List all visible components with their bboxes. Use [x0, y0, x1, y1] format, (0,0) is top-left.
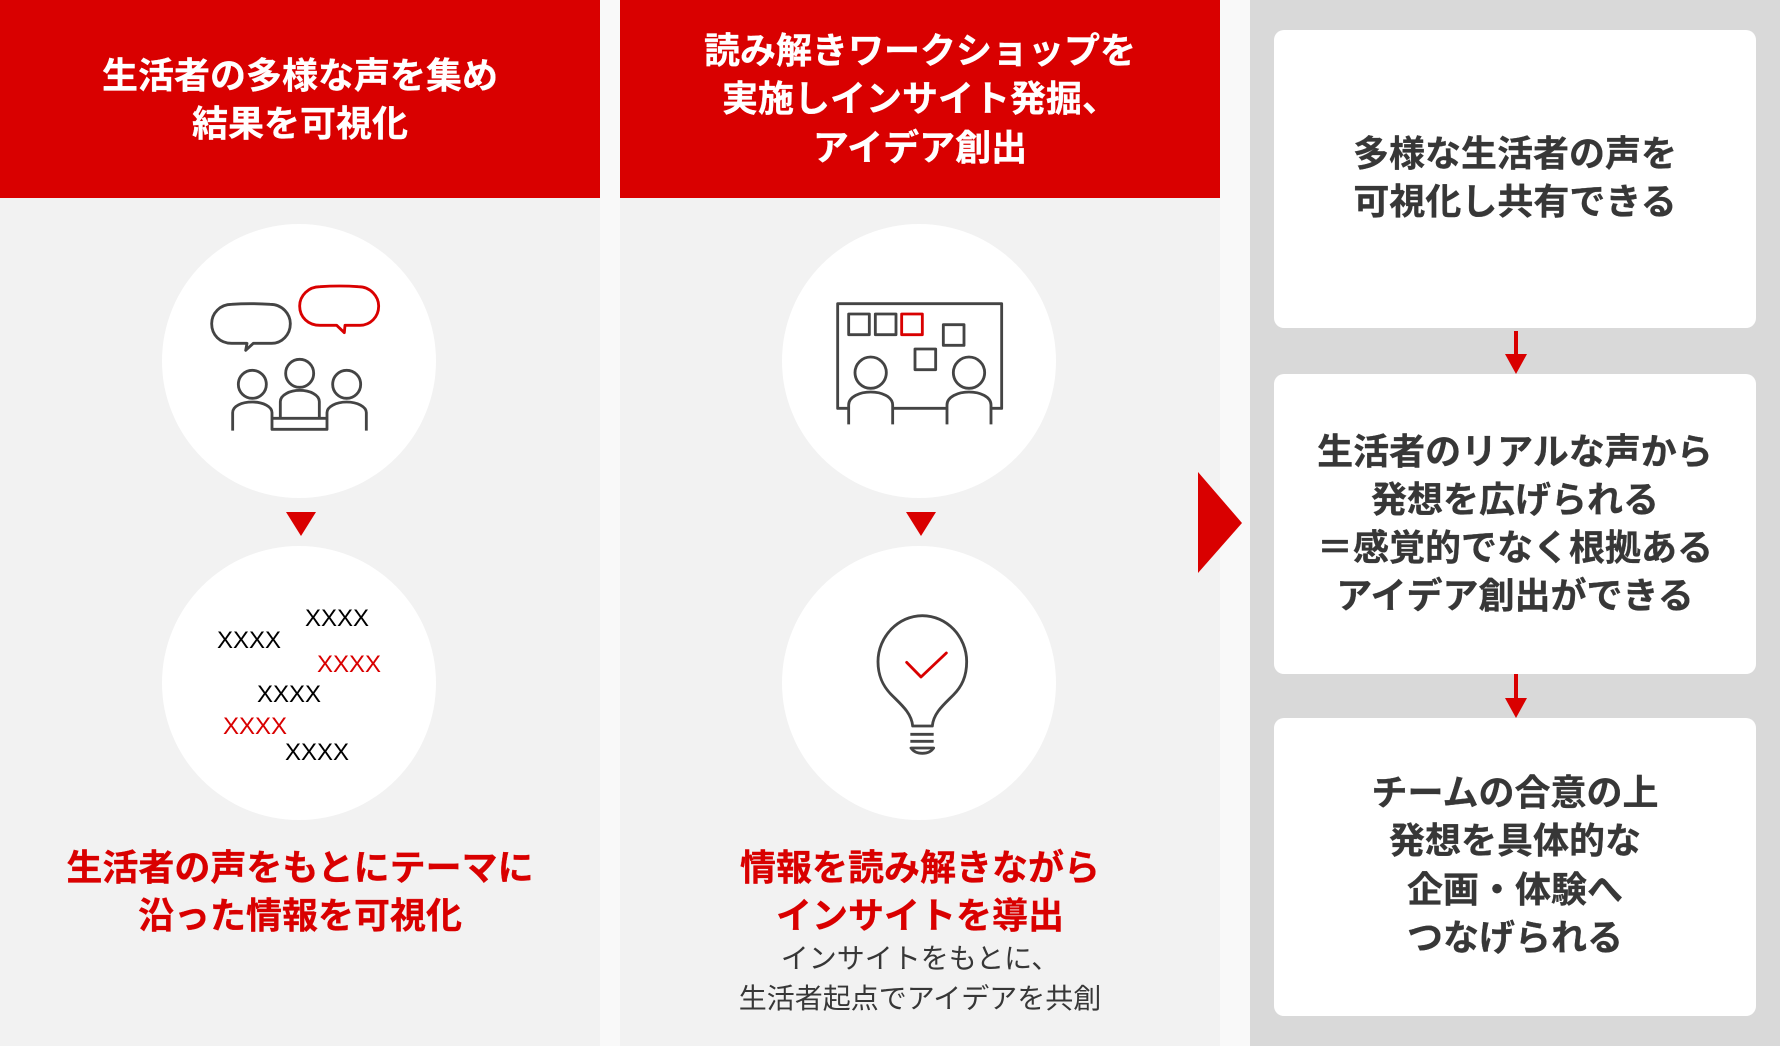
- text: outcome 2: [1317, 430, 1713, 616]
- text: outcome 1: 多様な生活者の声を: [1353, 132, 1677, 174]
- text: column 2 note: [739, 943, 1101, 1014]
- arrow: card 2 to card 3: [1505, 674, 1527, 718]
- text: column 2 note: インサイトをもとに、: [781, 943, 1059, 974]
- icon: workshop board: [838, 304, 1002, 424]
- heading: column 1: 生活者の多様な声を集め: [102, 54, 498, 96]
- circle: workshop: [782, 224, 1056, 498]
- keywords cloud: [217, 605, 381, 766]
- card: outcome 3: [1274, 718, 1756, 1016]
- arrow: column 1 down: [286, 512, 316, 536]
- text: column 2 note: 生活者起点でアイデアを共創: [739, 983, 1101, 1014]
- text: outcome 2: 生活者のリアルな声から: [1317, 430, 1713, 472]
- arrow: column 2 down: [906, 512, 936, 536]
- panel: right outcomes background: [1250, 0, 1780, 1046]
- keywords cloud: XXXX: [285, 739, 349, 766]
- text: outcome 2: ＝感覚的でなく根拠ある: [1317, 527, 1713, 568]
- heading: column 2: アイデア創出: [813, 127, 1027, 168]
- circle: insight: [782, 546, 1056, 820]
- text: outcome 2: アイデア創出ができる: [1336, 575, 1694, 616]
- arrow: to outcomes: [1198, 472, 1242, 573]
- text: column 1 conclusion: 沿った情報を可視化: [138, 895, 462, 936]
- text: outcome 3: [1372, 772, 1658, 958]
- keywords cloud: XXXX: [305, 605, 369, 632]
- text: outcome 3: チームの合意の上: [1372, 772, 1658, 813]
- text: outcome 1: [1353, 132, 1677, 222]
- icon: people talking: [212, 286, 379, 431]
- heading: column 2: 実施しインサイト発掘、: [722, 78, 1118, 119]
- card: outcome 2: [1274, 374, 1756, 674]
- text: outcome 3: 企画・体験へ: [1407, 869, 1623, 910]
- keywords cloud: XXXX: [223, 713, 287, 740]
- text: column 2 conclusion: 情報を読み解きながら: [740, 846, 1100, 888]
- icon: light bulb: [878, 616, 967, 753]
- text: outcome 2: 発想を広げられる: [1371, 479, 1659, 520]
- heading: column 2: [704, 30, 1136, 168]
- text: outcome 3: つなげられる: [1407, 917, 1623, 958]
- text: outcome 1: 可視化し共有できる: [1353, 181, 1677, 222]
- circle: discussion: [162, 224, 436, 498]
- text: outcome 3: 発想を具体的な: [1389, 820, 1641, 861]
- keywords cloud: XXXX: [257, 681, 321, 708]
- card: outcome 1: [1274, 30, 1756, 328]
- text: column 2 conclusion: インサイトを導出: [776, 895, 1064, 936]
- text: column 2 conclusion: [740, 846, 1100, 936]
- text: column 1 conclusion: 生活者の声をもとにテーマに: [66, 846, 534, 888]
- arrow: card 1 to card 2: [1505, 331, 1527, 374]
- header: column 1: [0, 0, 600, 198]
- keywords cloud: XXXX: [317, 651, 381, 678]
- circle: keywords: [162, 546, 436, 820]
- heading: column 1: [102, 54, 498, 144]
- header: column 2: [620, 0, 1220, 198]
- heading: column 1: 結果を可視化: [192, 103, 408, 144]
- panel: column 1 background: [0, 0, 600, 1046]
- keywords cloud: XXXX: [217, 627, 281, 654]
- panel: column 2 background: [620, 0, 1220, 1046]
- text: column 1 conclusion: [66, 846, 534, 936]
- heading: column 2: 読み解きワークショップを: [704, 30, 1136, 71]
